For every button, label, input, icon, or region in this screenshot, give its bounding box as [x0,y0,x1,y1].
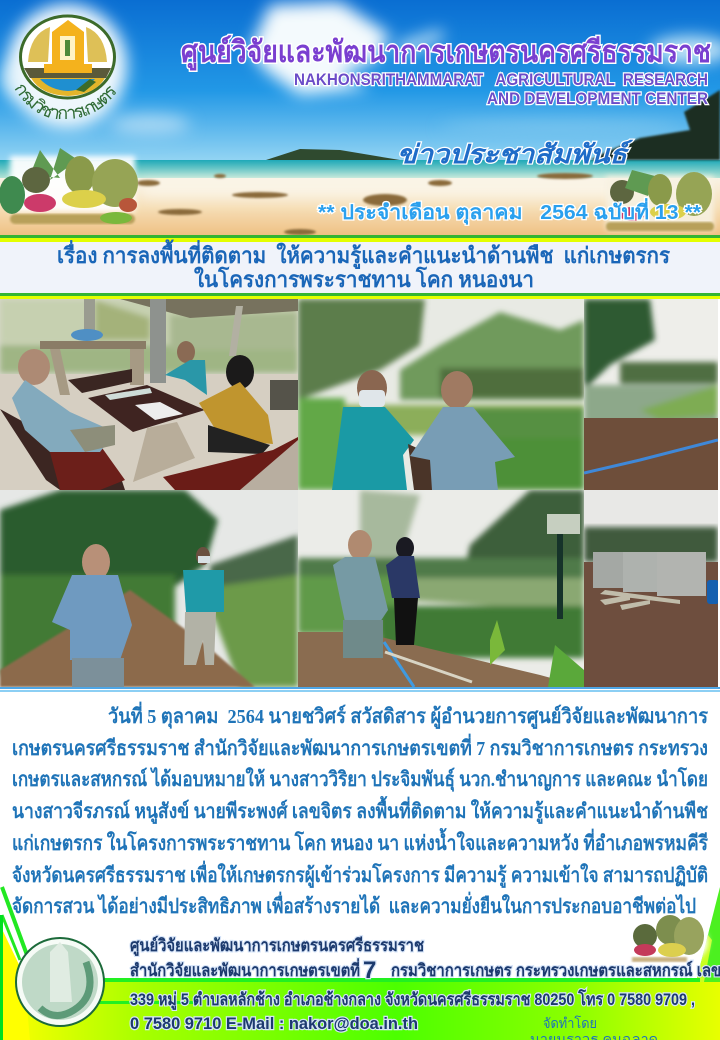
man left [0,409,125,490]
photo 1: meeting at pavilion table [0,299,298,490]
headline line 1: เรื่อง การลงพื้นที่ติดตาม ให้ความรู้และคำแนะนำด้านพืช แก่เกษตรกร [57,239,670,270]
photo 2: two men in oil palm plantation [298,299,584,490]
header fruit cluster right [606,170,714,231]
footer fruit cluster [628,915,708,967]
issue line: ** ประจำเดือน ตุลาคม 2564 ฉบับที่ 13 ** [318,197,701,225]
subtitle: public relations news: ข่าวประชาสัมพันธ์ [397,139,634,169]
credit: prepared by [530,1015,658,1040]
footer text: phone and email: 0 7580 9710 E-Mail : nakor@doa.in.th [130,1014,418,1033]
photo 5: farmer and officer by banana plant and sign [298,490,584,687]
footer seal logo [16,938,104,1026]
shore trees [590,90,720,160]
footer text: office and ministry: 7 [363,957,376,984]
credit: prepared by: จัดทำโดย [543,1015,597,1032]
logo: department of agriculture crest [0,0,140,139]
table [88,385,205,432]
divider under photos [0,687,720,692]
logo caption: กรมวิชาการเกษตร [14,84,116,119]
footer green background [0,887,720,1040]
bench [163,437,298,490]
header fruit cluster left [0,148,138,224]
title band [0,235,720,299]
woman yellow [226,355,254,389]
footer text: office and ministry: สำนักวิจัยและพัฒนาการเกษตรเขตที่ [130,958,360,980]
header banner: beach photo [0,0,720,235]
headline line 2: ในโครงการพระราชทาน โคก หนองนา [194,266,534,292]
photo 6: concrete water tanks [584,490,719,687]
body paragraph [12,701,708,918]
photo 3: field with blue pipe [584,299,718,490]
photo 4: two men on dirt path [0,490,298,687]
sea island [266,149,400,160]
man teal [177,341,195,363]
footer text: center name: ศูนย์วิจัยและพัฒนาการเกษตรนครศรีธรรมราช [130,935,424,957]
footer text: office and ministry [129,957,720,980]
